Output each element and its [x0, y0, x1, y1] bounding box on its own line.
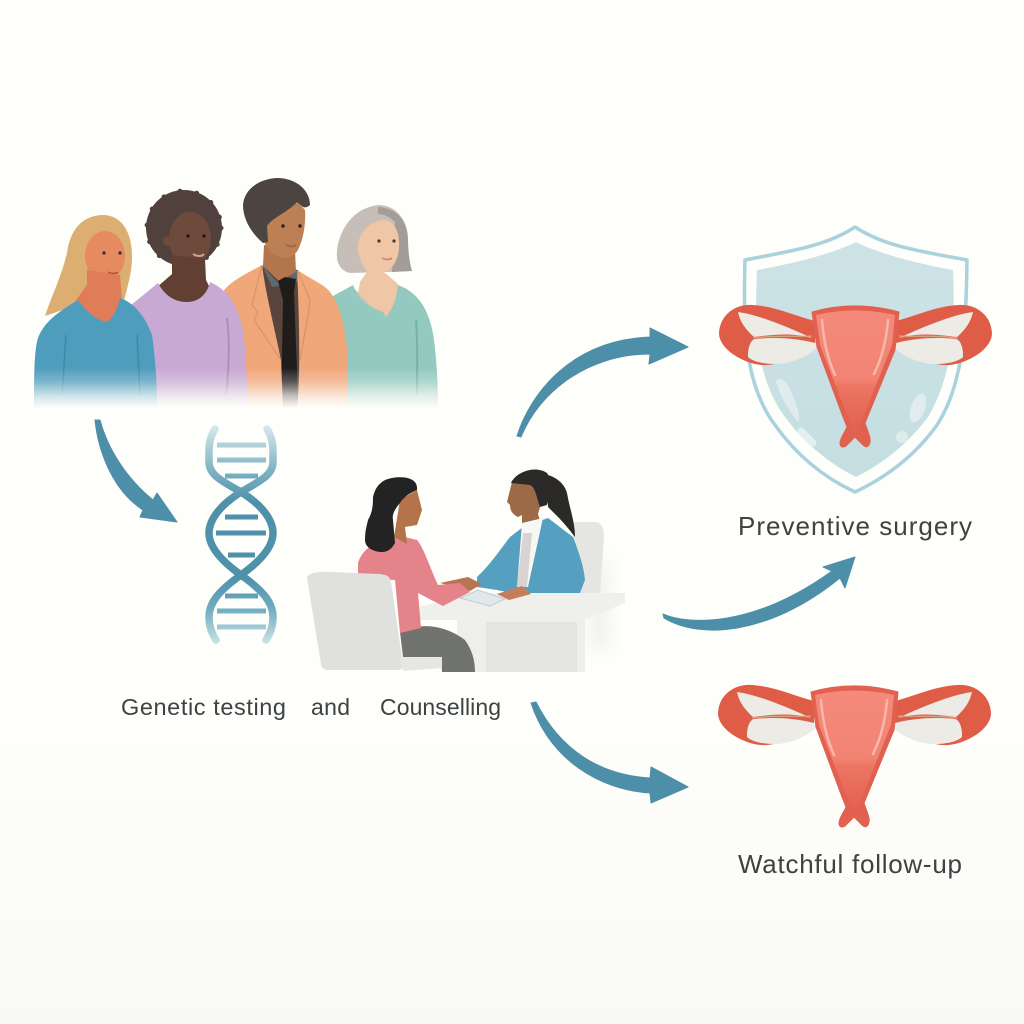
person: grey haired woman in teal: [330, 205, 438, 408]
arrow: counselling to preventive surgery: [663, 557, 855, 630]
shield highlights: [776, 379, 799, 422]
client neck and face: [394, 490, 422, 544]
client hair: [365, 477, 417, 552]
counsellor blazer: [477, 518, 585, 598]
icon: protective shield with uterus: [719, 227, 992, 492]
counsellor chair: [573, 522, 604, 594]
arrow: to preventive surgery: [517, 328, 688, 437]
counsellor neck and face: [507, 480, 543, 535]
label: genetic testing: Genetic testing: [121, 694, 286, 720]
document and hands: [460, 590, 505, 606]
desk shadow: [590, 560, 608, 650]
person: blonde woman in blue: [34, 215, 157, 408]
client legs: [400, 626, 475, 672]
arrow: counselling to watchful follow-up: [531, 702, 688, 803]
arrow: people to DNA: [95, 420, 177, 522]
rungs: [216, 445, 266, 627]
label: counselling: Counselling: [380, 694, 501, 720]
person: person with short dark hair in orange blazer and black tie: [224, 178, 348, 408]
counsellor shirt and tie: [517, 518, 543, 587]
label: and: and: [311, 694, 350, 720]
group of four diverse women: [34, 178, 438, 408]
strands: [209, 429, 273, 640]
shield fill: [756, 242, 954, 477]
counsellor hair: [511, 470, 550, 507]
uterus and ovaries: [719, 305, 992, 447]
desk: [457, 620, 585, 672]
client chair: [307, 572, 403, 670]
label: watchful follow-up: Watchful follow-up: [738, 849, 962, 879]
counsellor ponytail: [548, 475, 575, 537]
client top: [358, 535, 470, 633]
icon: DNA double helix: [209, 429, 273, 640]
icon: uterus and ovaries: [718, 685, 991, 827]
illustration: counselling scene: [307, 470, 625, 672]
person: woman with curly dark hair in lilac: [132, 188, 247, 404]
shield outline: [744, 227, 967, 492]
label: preventive surgery: Preventive surgery: [738, 511, 972, 541]
